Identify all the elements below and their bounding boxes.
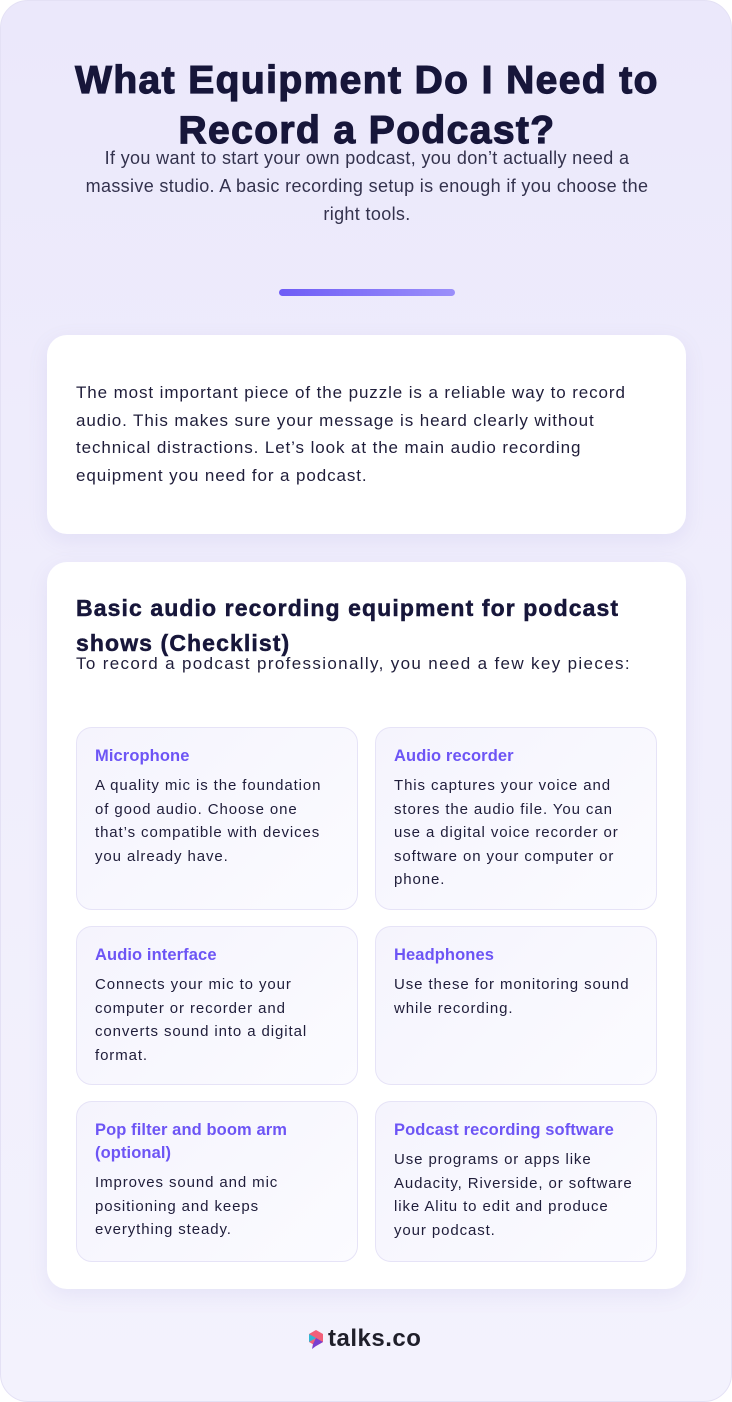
item: headphones [375,926,657,1085]
item: pop filter: Pop filter and boom arm [95,1121,287,1139]
item: headphones: while recording. [394,1000,513,1016]
item: pop filter: positioning and keeps [95,1198,259,1214]
title: Record a Podcast? [178,109,556,152]
item: pop filter: everything steady. [95,1221,232,1238]
item: microphone: that’s compatible with devices [95,824,320,841]
item: software: like Alitu to edit and produce [394,1198,609,1215]
item: audio interface: Connects your mic to your [95,976,292,993]
panel: checklist [47,562,686,1289]
item: microphone: you already have. [95,848,229,864]
item: audio interface: Audio interface [95,946,217,964]
accent bar [279,289,455,296]
logo: talks.co [328,1325,421,1352]
subtitle: right tools. [323,204,411,224]
item: headphones: Headphones [394,946,494,964]
item: software: Use programs or apps like [394,1151,592,1168]
item: microphone: of good audio. Choose one [95,800,298,818]
item: audio interface [76,926,358,1085]
item: audio recorder [375,727,657,910]
title: What Equipment Do I Need to [75,59,659,102]
item: audio interface: computer or recorder and [95,1000,286,1016]
intro text [76,383,626,485]
intro text: equipment you need for a podcast. [76,466,368,485]
item: software: Podcast recording software [394,1121,614,1139]
item: pop filter [76,1101,358,1262]
icon: logo mark [309,1330,323,1349]
item: audio interface: converts sound into a digital [95,1023,307,1040]
subtitle [86,148,648,224]
item: microphone [76,727,358,910]
intro text: The most important piece of the puzzle is a reliable way to record [76,383,626,402]
checklist heading [76,595,619,656]
item: audio recorder: software on your computer or [394,848,614,864]
subtitle: If you want to start your own podcast, you don’t actually need a [105,148,629,168]
item: audio recorder: phone. [394,871,445,888]
item: software [375,1101,657,1262]
panel: intro [47,335,686,534]
intro text: audio. This makes sure your message is heard clearly without [76,411,595,430]
item: headphones: Use these for monitoring sound [394,976,629,993]
item: audio recorder: This captures your voice and [394,777,611,794]
item: audio recorder: stores the audio file. You can [394,800,613,818]
item: microphone: Microphone [95,747,190,765]
item: software: your podcast. [394,1222,496,1238]
checklist heading: Basic audio recording equipment for podcast [76,595,619,621]
checklist heading: shows (Checklist) [76,630,290,656]
intro text: technical distractions. Let’s look at the main audio recording [76,438,581,457]
item: audio recorder: use a digital voice recorder or [394,824,619,841]
checklist lead: To record a podcast professionally, you need a few key pieces: [76,654,631,673]
item: pop filter: (optional) [95,1144,171,1162]
title [74,59,659,152]
item: audio interface: format. [95,1046,148,1064]
item: microphone: A quality mic is the foundation [95,777,321,794]
item: pop filter: Improves sound and mic [95,1174,278,1191]
subtitle: massive studio. A basic recording setup is enough if you choose the [86,176,648,196]
item: audio recorder: Audio recorder [394,747,514,765]
item: software: Audacity, Riverside, or software [394,1174,633,1192]
